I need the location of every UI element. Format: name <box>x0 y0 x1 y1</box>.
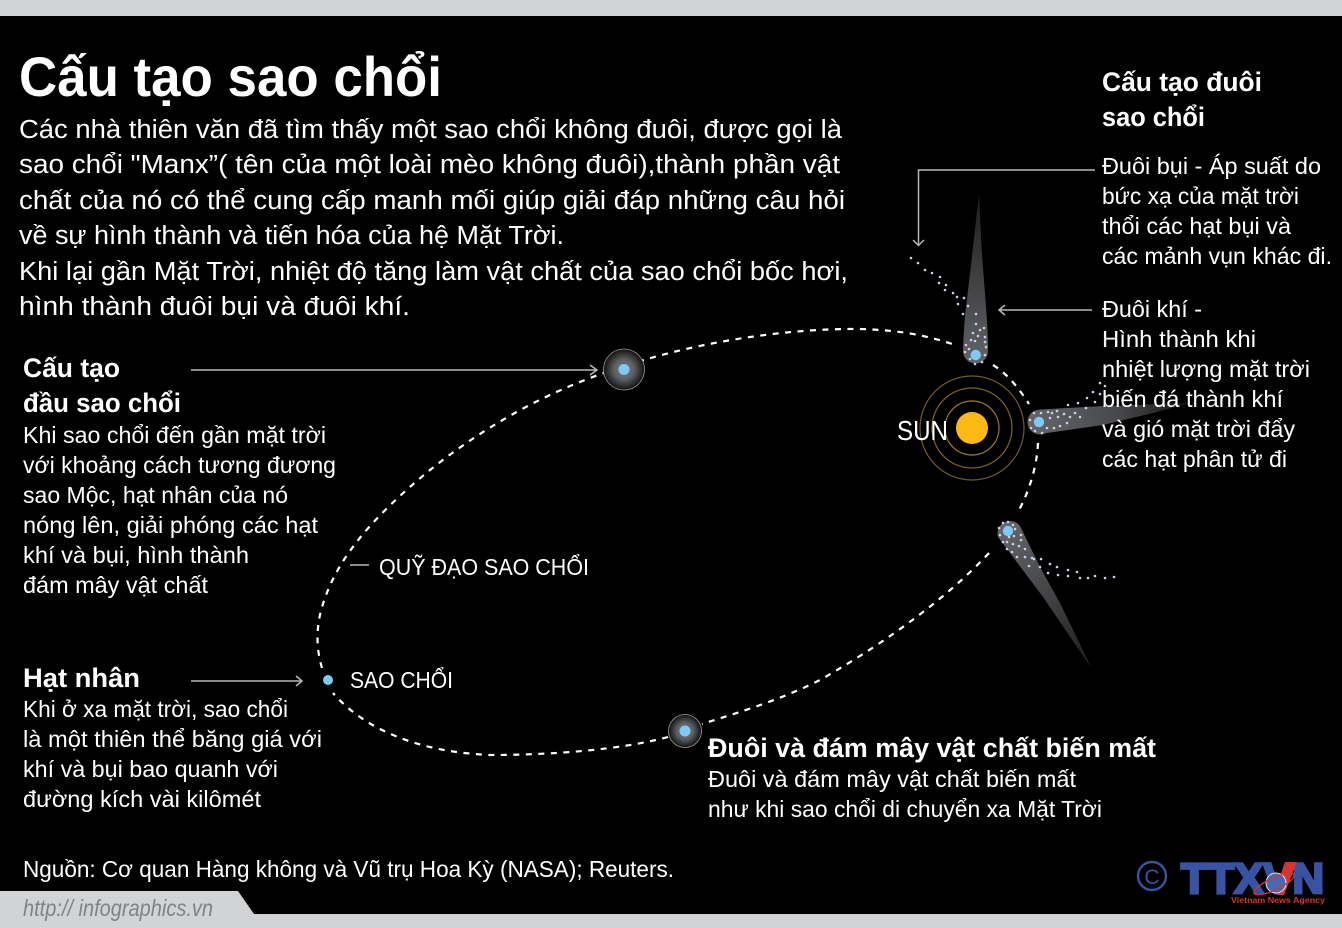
panel: comet head <box>23 353 336 598</box>
text: comet head: khí và bụi, hình thành <box>23 542 249 568</box>
comet right: tail, dust and nucleus <box>1028 382 1190 434</box>
text: gas tail: biến đá thành khí <box>1102 386 1283 412</box>
coma sphere top <box>604 349 644 390</box>
heading: tail composition <box>1102 67 1262 132</box>
text: nucleus: Khi ở xa mặt trời, sao chổi <box>23 696 288 722</box>
website url: http:// infographics.vn <box>23 895 213 921</box>
intro text block: về sự hình thành và tiến hóa của hệ Mặt Trời. <box>19 222 564 250</box>
title: Cấu tạo sao chổi <box>19 45 442 108</box>
heading: tail composition: Cấu tạo đuôi <box>1102 67 1262 97</box>
text: comet head: Khi sao chổi đến gần mặt trời <box>23 422 326 448</box>
text: comet head: với khoảng cách tương đương <box>23 452 336 478</box>
text: comet head: sao Mộc, hạt nhân của nó <box>23 482 288 508</box>
logo tagline: Vietnam News Agency <box>1231 895 1325 905</box>
coma sphere bottom <box>668 714 702 748</box>
logo wordmark: TTXVN <box>1181 855 1324 903</box>
arrow: gas tail <box>999 305 1092 315</box>
heading: comet head: đầu sao chổi <box>23 388 181 418</box>
intro text block: sao chổi "Manx”( tên của một loài mèo không đuôi),thành phần vật <box>19 151 840 179</box>
text: comet head: nóng lên, giải phóng các hạt <box>23 512 318 538</box>
comet top: tail, dust and nucleus <box>910 193 988 365</box>
intro text block: Các nhà thiên văn đã tìm thấy một sao chổi không đuôi, được gọi là <box>19 116 843 144</box>
text: gas tail: các hạt phân tử đi <box>1102 446 1287 472</box>
panel: nucleus <box>23 663 322 812</box>
icon: copyright: C <box>1144 866 1160 889</box>
text: comet head <box>23 422 336 598</box>
text: dust tail <box>1102 153 1332 269</box>
intro text block: hình thành đuôi bụi và đuôi khí. <box>19 293 410 321</box>
text: tail disappears <box>708 766 1102 822</box>
text: tail disappears: như khi sao chổi di chuyển xa Mặt Trời <box>708 796 1102 822</box>
text: dust tail: Đuôi bụi - Áp suất do <box>1102 153 1321 179</box>
text: dust tail: thổi các hạt bụi và <box>1102 213 1292 239</box>
text: tail disappears: Đuôi và đám mây vật chất biến mất <box>708 766 1076 792</box>
text: nucleus: đường kích vài kilômét <box>23 786 261 812</box>
heading: nucleus: Hạt nhân <box>23 663 140 693</box>
arrow: orbit label line <box>350 564 369 566</box>
heading: tail composition: sao chổi <box>1102 102 1205 132</box>
text: nucleus: khí và bụi bao quanh với <box>23 756 278 782</box>
text: gas tail: Hình thành khi <box>1102 326 1256 352</box>
text: comet head: đám mây vật chất <box>23 572 208 598</box>
top strip <box>0 0 1342 16</box>
comet orbit <box>317 329 1038 755</box>
text: gas tail <box>1102 296 1310 472</box>
arrow: to nucleus <box>191 676 302 686</box>
comet lower: tail, dust and nucleus <box>997 521 1115 669</box>
text: nucleus: là một thiên thể băng giá với <box>23 726 322 752</box>
intro text block <box>19 116 848 321</box>
arrow: dust tail <box>913 170 1095 246</box>
panel: tail disappears <box>708 733 1156 822</box>
sun with rings <box>920 376 1024 480</box>
comet nucleus dot <box>323 675 333 685</box>
bottom strip with website tab <box>0 891 1342 928</box>
logo: TTXVN <box>1138 855 1325 905</box>
icon: copyright <box>1138 862 1166 890</box>
label: comet: SAO CHỔI <box>350 666 453 693</box>
label: comet orbit: QUỸ ĐẠO SAO CHỔI <box>379 553 589 580</box>
arrow: to comet head <box>191 365 597 375</box>
heading: tail disappears: Đuôi và đám mây vật chất biến mất <box>708 733 1156 763</box>
intro text block: chất của nó có thể cung cấp manh mối giúp giải đáp những câu hỏi <box>19 187 845 215</box>
panel: tail composition <box>1102 67 1332 472</box>
intro text block: Khi lại gần Mặt Trời, nhiệt độ tăng làm vật chất của sao chổi bốc hơi, <box>19 258 848 286</box>
text: gas tail: nhiệt lượng mặt trời <box>1102 356 1310 382</box>
text: nucleus <box>23 696 322 812</box>
heading: comet head: Cấu tạo <box>23 353 120 383</box>
heading: comet head <box>23 353 181 418</box>
source note: Nguồn: Cơ quan Hàng không và Vũ trụ Hoa Kỳ (NASA); Reuters. <box>23 856 674 882</box>
logo red V accent and globe <box>1252 862 1297 899</box>
text: gas tail: và gió mặt trời đẩy <box>1102 416 1295 442</box>
sun label: SUN <box>897 415 948 446</box>
text: dust tail: các mảnh vụn khác đi. <box>1102 243 1332 269</box>
text: dust tail: bức xạ của mặt trời <box>1102 183 1299 209</box>
text: gas tail: Đuôi khí - <box>1102 296 1202 322</box>
